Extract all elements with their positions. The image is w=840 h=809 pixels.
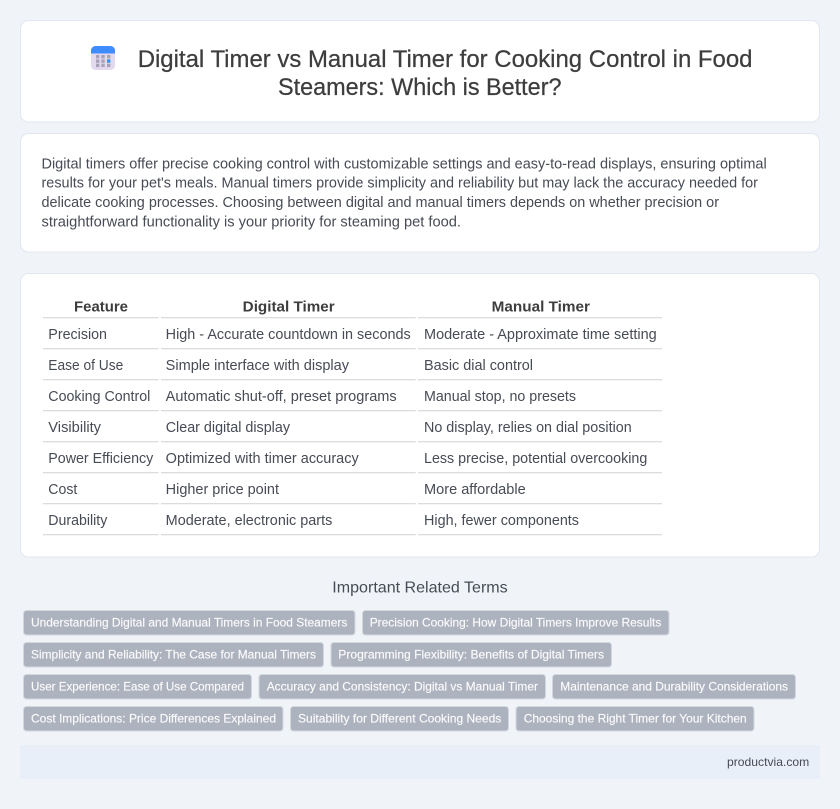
tag [24, 610, 355, 635]
icon: calendar timer [91, 46, 115, 70]
related term tags [24, 610, 796, 731]
panel: description [20, 134, 820, 252]
tag: Accuracy and Consistency: Digital vs Manual Timer [267, 680, 538, 694]
tag [516, 706, 754, 731]
table row: durability: Durability [48, 513, 108, 529]
table row: precision: High - Accurate countdown in seconds [166, 327, 411, 343]
heading: important related terms: Important Related Terms [332, 580, 508, 597]
table row: cost [48, 482, 526, 498]
table row: visibility: Clear digital display [166, 420, 291, 436]
text block: summary paragraph: straightforward functionality is your priority for steaming pet food. [42, 215, 461, 231]
text block: summary paragraph: delicate cooking processes. Choosing between digital and manual timers depends on whether precision or [42, 195, 719, 211]
table row: precision: Precision [48, 327, 107, 343]
text block: summary paragraph: results for your pet's meals. Manual timers provide simplicity and reliability but may lack the accuracy needed for [42, 176, 758, 192]
table row: cooking control: Cooking Control [48, 389, 150, 405]
table row: precision [48, 327, 657, 343]
table header row: Manual Timer [492, 299, 590, 316]
footer [20, 745, 820, 779]
table row: power efficiency: Optimized with timer accuracy [166, 451, 359, 467]
tag: Cost Implications: Price Differences Explained [31, 712, 276, 726]
tag: Suitability for Different Cooking Needs [298, 712, 501, 726]
panel: header [20, 20, 820, 122]
text block: summary paragraph [42, 157, 767, 231]
table row: cooking control [48, 389, 576, 405]
text block: summary paragraph: Digital timers offer precise cooking control with customizable settings and easy-to-read displays, ensuring optimal [42, 157, 767, 173]
table row: ease of use [48, 358, 533, 374]
tag: Maintenance and Durability Considerations [560, 680, 788, 694]
table row: durability: High, fewer components [424, 513, 579, 529]
tag: Choosing the Right Timer for Your Kitchen [524, 712, 747, 726]
table row: durability [48, 513, 579, 529]
table row: ease of use: Simple interface with display [166, 358, 350, 374]
table header row: Digital Timer [243, 299, 335, 316]
tag [24, 642, 324, 667]
table row: ease of use: Basic dial control [424, 358, 533, 374]
tag: Understanding Digital and Manual Timers in Food Steamers [31, 616, 347, 630]
table row: power efficiency: Less precise, potential overcooking [424, 451, 647, 467]
table row: power efficiency [48, 451, 647, 467]
title: Digital Timer vs Manual Timer for Cooking Control in Food [138, 46, 752, 73]
table header row [74, 299, 590, 316]
table row: visibility [48, 420, 632, 436]
table row: ease of use: Ease of Use [48, 358, 123, 374]
tag [552, 674, 796, 699]
tag: Simplicity and Reliability: The Case for Manual Timers [31, 648, 316, 662]
panel: comparison table [20, 274, 820, 557]
tag: Precision Cooking: How Digital Timers Improve Results [370, 616, 661, 630]
table row: visibility: Visibility [48, 420, 102, 436]
tag: User Experience: Ease of Use Compared [31, 680, 244, 694]
table row: cost: Higher price point [166, 482, 279, 498]
footer text: source: productvia.com [727, 755, 809, 769]
tag [362, 610, 669, 635]
tag [259, 674, 546, 699]
tag [24, 706, 283, 731]
tag [331, 642, 612, 667]
tag [290, 706, 508, 731]
table row: cost: Cost [48, 482, 77, 498]
table header row: Feature [74, 299, 128, 316]
tag [24, 674, 252, 699]
title: Steamers: Which is Better? [278, 74, 562, 101]
table row: cost: More affordable [424, 482, 526, 498]
table row: power efficiency: Power Efficiency [48, 451, 154, 467]
tag: Programming Flexibility: Benefits of Digital Timers [338, 648, 604, 662]
table row: precision: Moderate - Approximate time setting [424, 327, 657, 343]
table row: durability: Moderate, electronic parts [166, 513, 332, 529]
table row: cooking control: Manual stop, no presets [424, 389, 576, 405]
table row: cooking control: Automatic shut-off, preset programs [166, 389, 397, 405]
title [138, 46, 752, 101]
table row: visibility: No display, relies on dial position [424, 420, 632, 436]
